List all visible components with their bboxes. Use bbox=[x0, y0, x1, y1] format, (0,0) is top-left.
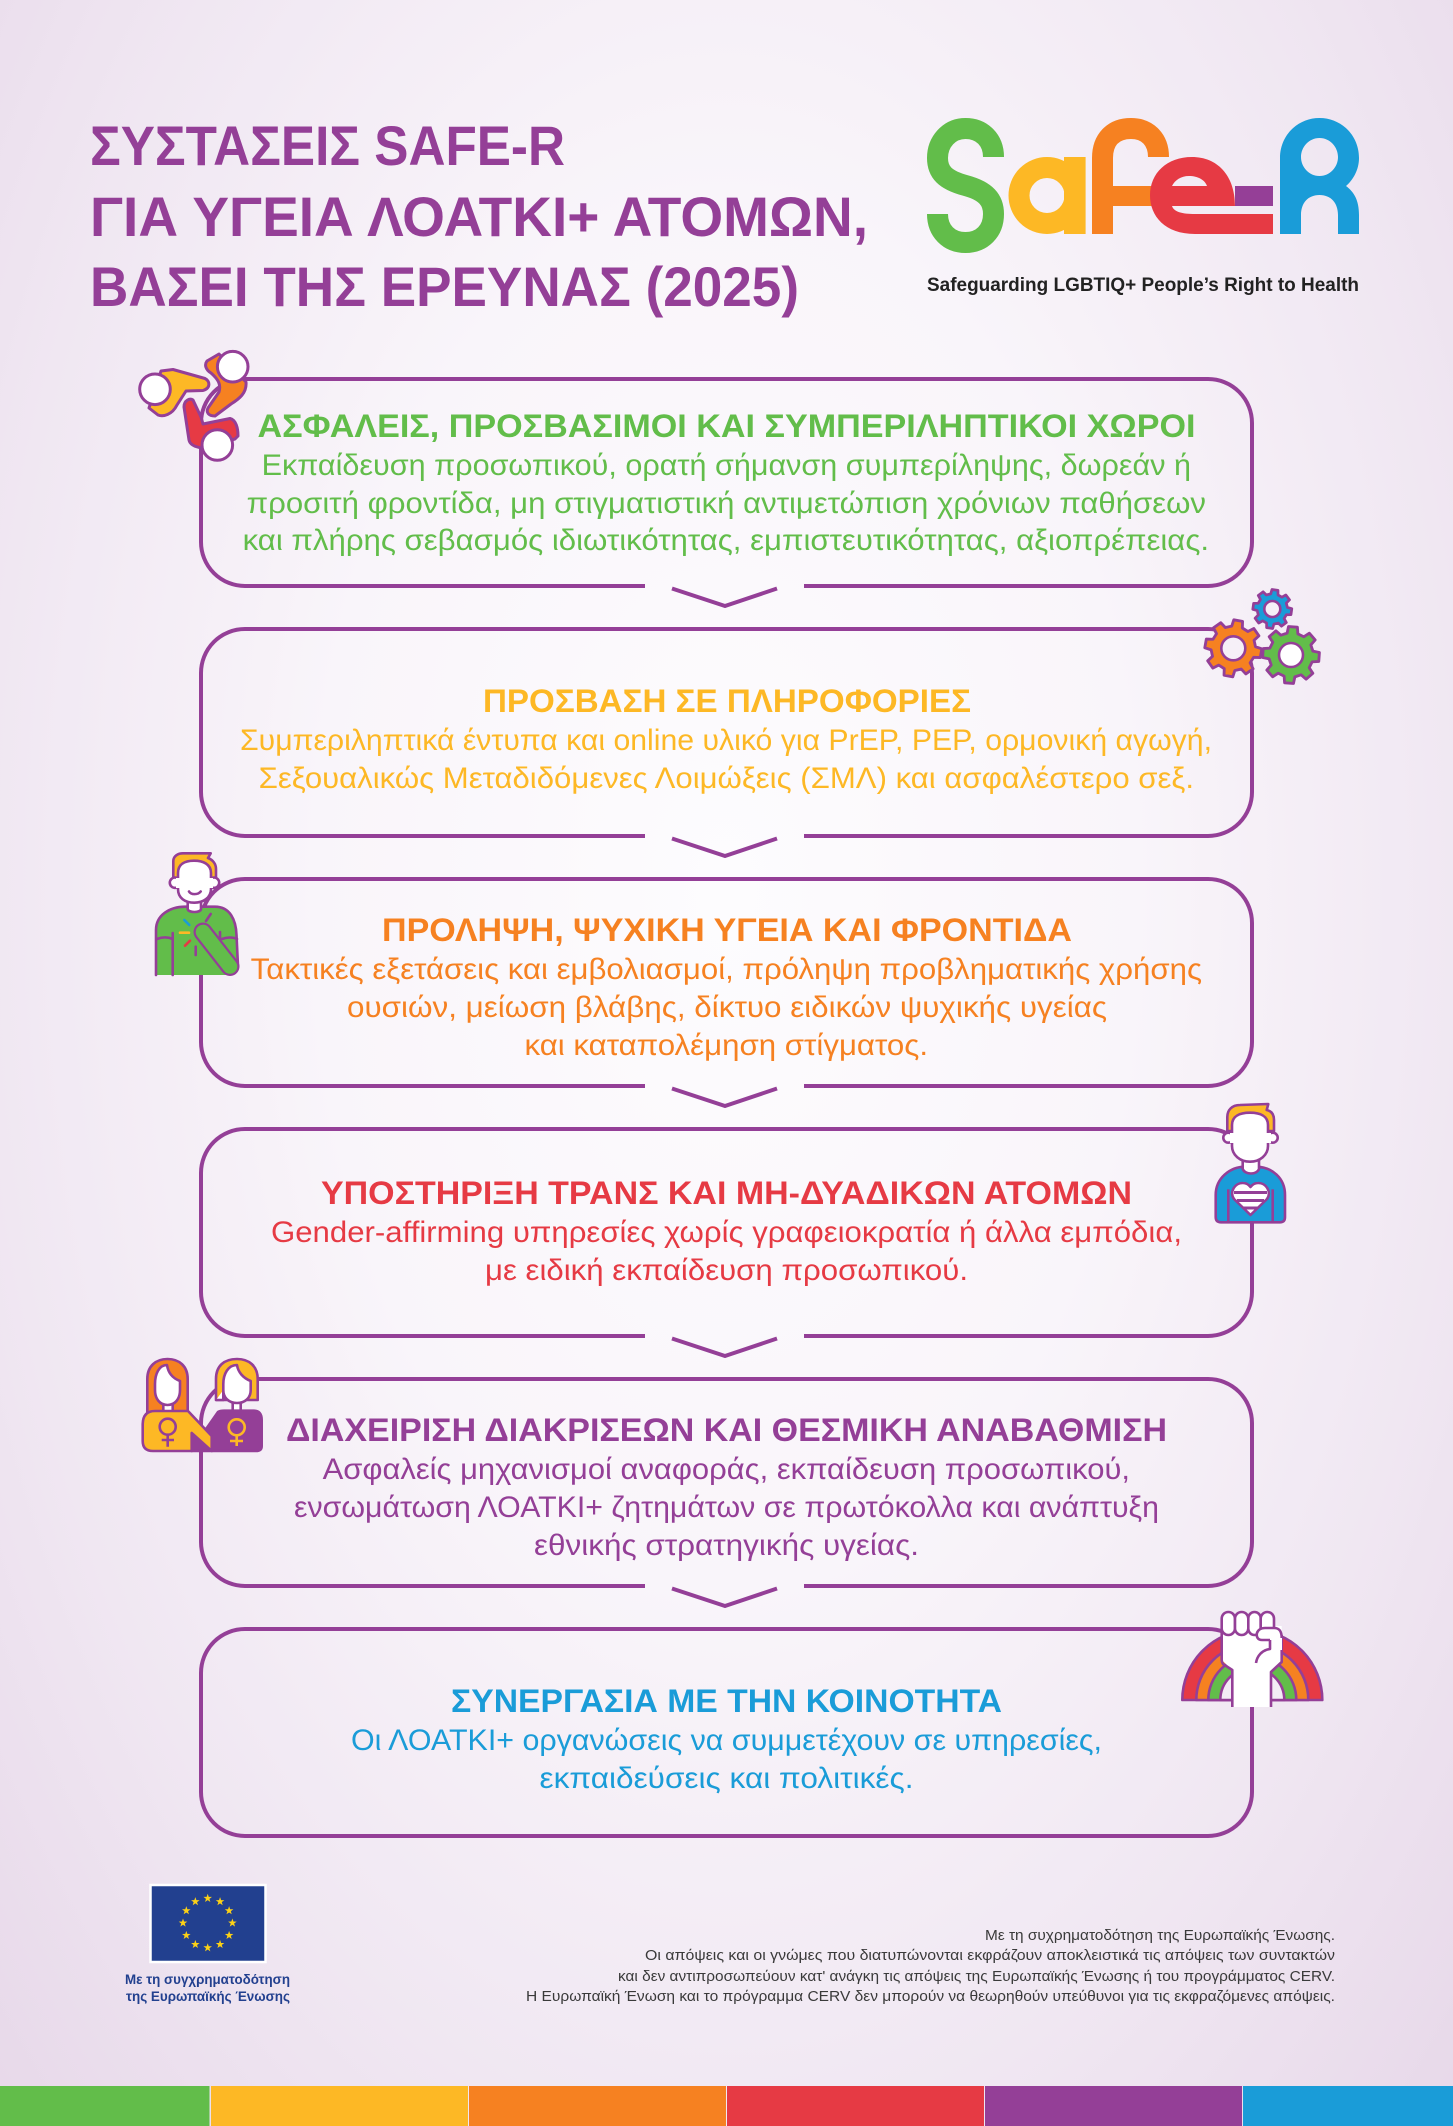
arrow 1 bbox=[672, 588, 777, 606]
disclaimer text: Η Ευρωπαϊκή Ένωση και το πρόγραμμα CERV δεν μπορούν να θεωρηθούν υπεύθυνοι για τις εκφραζόμενες απόψεις. bbox=[526, 1988, 1335, 2005]
title: ΓΙΑ ΥΓΕΙΑ ΛΟΑΤΚΙ+ ΑΤΟΜΩΝ, bbox=[90, 185, 868, 248]
disclaimer text: Οι απόψεις και οι γνώμες που διατυπώνονται εκφράζουν αποκλειστικά τις απόψεις των συντακτών bbox=[645, 1947, 1335, 1964]
title: ΣΥΣΤΑΣΕΙΣ SAFE-R bbox=[90, 114, 565, 177]
text: trans support: με ειδική εκπαίδευση προσωπικού. bbox=[485, 1254, 968, 1287]
panel: information bbox=[201, 629, 1252, 836]
heading: information: ΠΡΟΣΒΑΣΗ ΣΕ ΠΛΗΡΟΦΟΡΙΕΣ bbox=[483, 683, 971, 719]
text: discrimination: ενσωμάτωση ΛΟΑΤΚΙ+ ζητημάτων σε πρωτόκολλα και ανάπτυξη bbox=[294, 1491, 1159, 1524]
heading: discrimination: ΔΙΑΧΕΙΡΙΣΗ ΔΙΑΚΡΙΣΕΩΝ ΚΑΙ ΘΕΣΜΙΚΗ ΑΝΑΒΑΘΜΙΣΗ bbox=[286, 1412, 1167, 1448]
text: information bbox=[240, 724, 1212, 795]
bottom colour bar bbox=[0, 2086, 1453, 2126]
panel: safe spaces bbox=[201, 379, 1252, 586]
icon: three people bbox=[140, 351, 248, 460]
text: community: Οι ΛΟΑΤΚΙ+ οργανώσεις να συμμετέχουν σε υπηρεσίες, bbox=[351, 1724, 1102, 1757]
panel: prevention bbox=[201, 879, 1252, 1086]
EU funding label: Με τη συγχρηματοδότηση bbox=[125, 1971, 290, 1987]
icon: two women bbox=[143, 1359, 262, 1451]
disclaimer text: και δεν αντιπροσωπεύουν κατ' ανάγκη τις απόψεις της Ευρωπαϊκής Ένωσης ή του προγράμματος CERV. bbox=[618, 1968, 1335, 1985]
arrow 2 bbox=[672, 838, 777, 856]
disclaimer text bbox=[526, 1927, 1335, 2005]
arrow 4 bbox=[672, 1338, 777, 1356]
text: information: Σεξουαλικώς Μεταδιδόμενες Λοιμώξεις (ΣΜΛ) και ασφαλέστερο σεξ. bbox=[259, 762, 1194, 795]
text: trans support bbox=[271, 1216, 1182, 1287]
text: safe spaces: προσιτή φροντίδα, μη στιγματιστική αντιμετώπιση χρόνιων παθήσεων bbox=[247, 487, 1206, 520]
heading: prevention: ΠΡΟΛΗΨΗ, ΨΥΧΙΚΗ ΥΓΕΙΑ ΚΑΙ ΦΡΟΝΤΙΔΑ bbox=[382, 912, 1072, 948]
icon: person with heart bbox=[1216, 1104, 1285, 1222]
text: safe spaces bbox=[243, 449, 1209, 557]
text: safe spaces: Εκπαίδευση προσωπικού, ορατή σήμανση συμπερίληψης, δωρεάν ή bbox=[262, 449, 1191, 482]
heading: safe spaces: ΑΣΦΑΛΕΙΣ, ΠΡΟΣΒΑΣΙΜΟΙ ΚΑΙ ΣΥΜΠΕΡΙΛΗΠΤΙΚΟΙ ΧΩΡΟΙ bbox=[258, 408, 1196, 444]
icon: man with hand on chest bbox=[156, 853, 238, 975]
disclaimer text: Με τη συχρηματοδότηση της Ευρωπαϊκής Ένωσης. bbox=[985, 1927, 1335, 1944]
title: ΒΑΣΕΙ ΤΗΣ ΕΡΕΥΝΑΣ (2025) bbox=[90, 255, 799, 318]
panel: trans support bbox=[201, 1129, 1252, 1336]
arrow 5 bbox=[672, 1588, 777, 1606]
panel: discrimination bbox=[201, 1379, 1252, 1586]
arrow 3 bbox=[672, 1088, 777, 1106]
icon: rainbow and raised fist bbox=[1182, 1612, 1322, 1707]
text: discrimination: εθνικής στρατηγικής υγείας. bbox=[534, 1529, 919, 1562]
heading: trans support: ΥΠΟΣΤΗΡΙΞΗ ΤΡΑΝΣ ΚΑΙ ΜΗ-ΔΥΑΔΙΚΩΝ ΑΤΟΜΩΝ bbox=[321, 1175, 1132, 1211]
text: community: εκπαιδεύσεις και πολιτικές. bbox=[540, 1762, 914, 1795]
text: prevention: Τακτικές εξετάσεις και εμβολιασμοί, πρόληψη προβληματικής χρήσης bbox=[251, 953, 1202, 986]
text: community bbox=[351, 1724, 1102, 1795]
EU funding label bbox=[125, 1971, 290, 2004]
text: discrimination: Ασφαλείς μηχανισμοί αναφοράς, εκπαίδευση προσωπικού, bbox=[323, 1453, 1130, 1486]
text: prevention: και καταπολέμηση στίγματος. bbox=[524, 1029, 928, 1062]
panel: community bbox=[201, 1629, 1252, 1836]
heading: community: ΣΥΝΕΡΓΑΣΙΑ ΜΕ ΤΗΝ ΚΟΙΝΟΤΗΤΑ bbox=[451, 1683, 1002, 1719]
text: trans support: Gender-affirming υπηρεσίες χωρίς γραφειοκρατία ή άλλα εμπόδια, bbox=[271, 1216, 1182, 1249]
EU funding label: της Ευρωπαϊκής Ένωσης bbox=[126, 1988, 290, 2004]
icon: EU flag bbox=[150, 1885, 266, 1962]
icon: gears bbox=[1201, 587, 1321, 685]
title bbox=[90, 114, 868, 318]
text: safe spaces: και πλήρης σεβασμός ιδιωτικότητας, εμπιστευτικότητας, αξιοπρέπειας. bbox=[243, 524, 1209, 557]
text: information: Συμπεριληπτικά έντυπα και online υλικό για PrEP, PEP, ορμονική αγωγή, bbox=[240, 724, 1212, 757]
text: prevention: ουσιών, μείωση βλάβης, δίκτυο ειδικών ψυχικής υγείας bbox=[347, 991, 1107, 1024]
logo: Safe-R bbox=[938, 118, 1359, 242]
text: prevention bbox=[251, 953, 1202, 1062]
logo tagline: Safeguarding LGBTIQ+ People’s Right to Health bbox=[927, 274, 1359, 296]
text: discrimination bbox=[294, 1453, 1159, 1562]
